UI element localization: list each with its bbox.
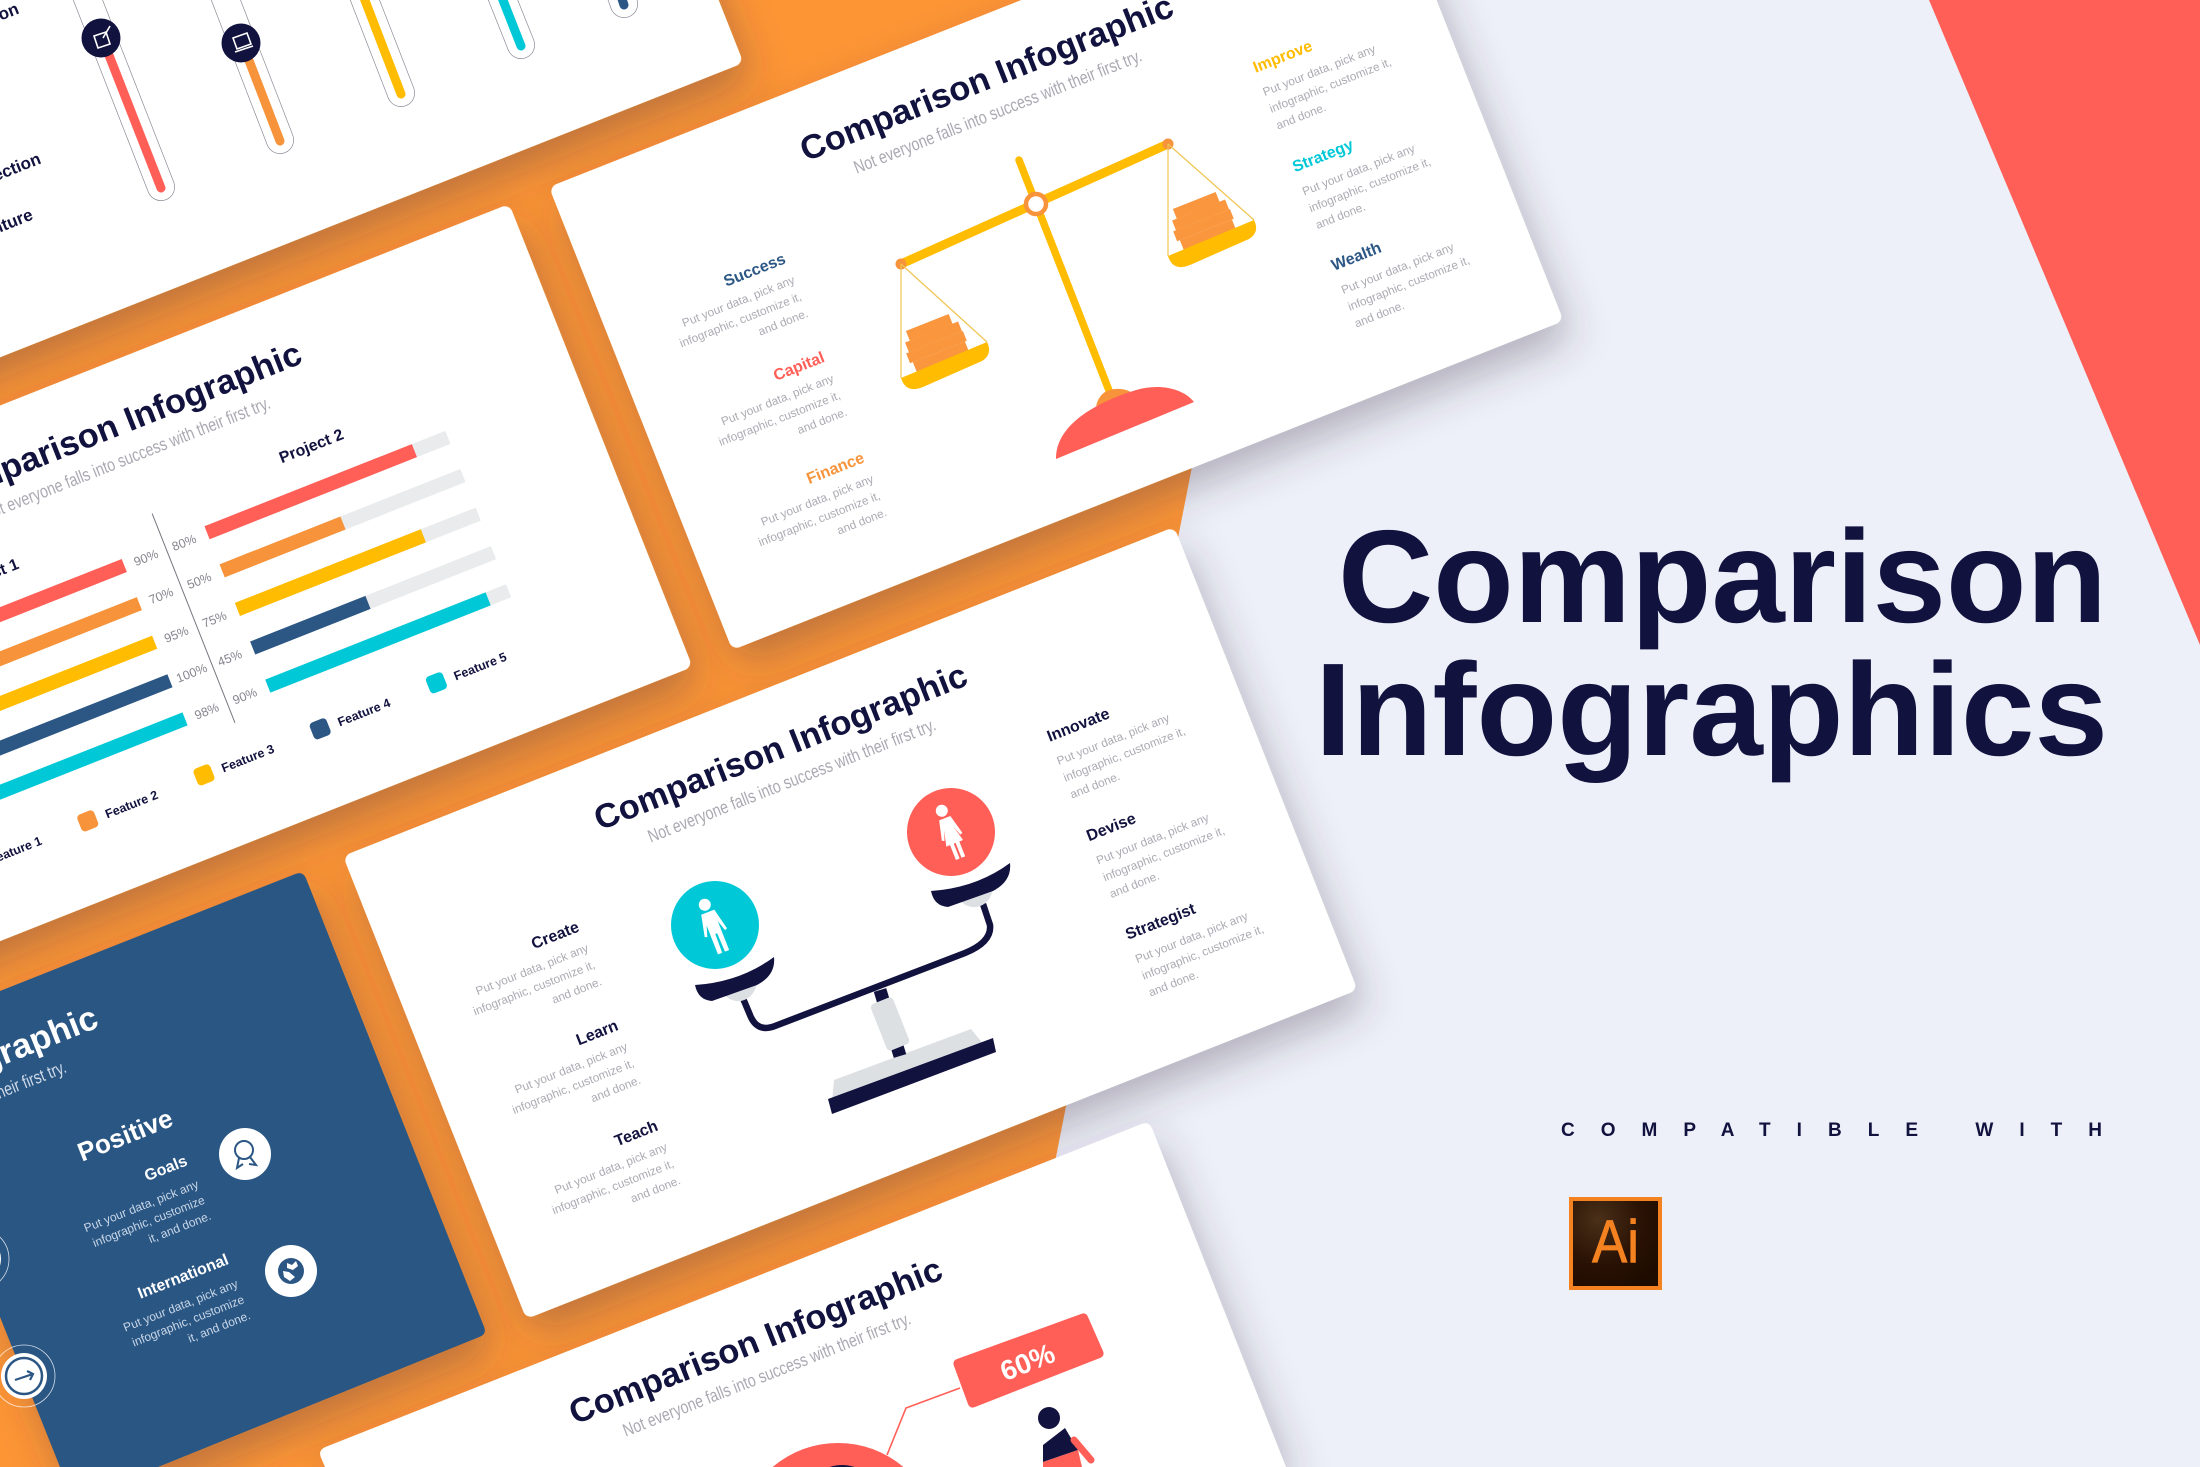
text: success: Success (721, 251, 788, 290)
project 1 percentages (129, 546, 224, 724)
panel: bar chart slide (0, 204, 693, 996)
text: teach: Teach (612, 1118, 660, 1150)
text: success: and done. (756, 306, 810, 339)
text: learn: Learn (574, 1017, 621, 1049)
icon: partial badge (0, 1228, 9, 1290)
text: improve: Improve (1251, 38, 1315, 77)
legend: Feature 4 (336, 696, 393, 729)
text: devise: infographic, customize it, (1101, 823, 1227, 884)
text: international: infographic, customize (130, 1292, 246, 1349)
project 1 bars (0, 559, 188, 821)
text: finance: Put your data, pick any (759, 472, 876, 529)
text: goals: infographic, customize (91, 1193, 207, 1250)
text: goals: it, and done. (146, 1209, 213, 1246)
project 1 percentages: 95% (162, 624, 191, 646)
text: teach: and done. (628, 1173, 682, 1206)
text: improve (1251, 13, 1400, 132)
connector line (887, 1388, 960, 1455)
text: learn: infographic, customize it, (510, 1056, 636, 1117)
text: wealth: Put your data, pick any (1339, 240, 1456, 297)
balance scale illustration (896, 138, 1256, 459)
text: strategist: and done. (1146, 967, 1200, 999)
subheading: Not everyone falls into success with their first try. (645, 715, 939, 847)
text: international: International (136, 1251, 231, 1303)
text: devise: Devise (1084, 810, 1139, 845)
tube 1 (84, 0, 161, 188)
text: teach: infographic, customize it, (550, 1156, 676, 1217)
text: international (111, 1251, 253, 1366)
text: learn: Put your data, pick any (513, 1039, 629, 1097)
text: devise: Put your data, pick any (1094, 810, 1211, 867)
text: finance: infographic, customize it, (756, 488, 882, 549)
text: wealth: infographic, customize it, (1346, 253, 1472, 314)
heading: Comparison Infographic (589, 656, 973, 838)
card and text (549, 0, 1564, 650)
project 2 percentages: 75% (200, 608, 229, 631)
tube 4 (499, 0, 521, 46)
text: finance: and done. (835, 505, 889, 537)
orange backdrop (0, 0, 1284, 1467)
left pan (898, 264, 989, 389)
text: improve: and done. (1274, 100, 1328, 132)
text: finance (741, 449, 889, 566)
text: goals: Put your data, pick any (82, 1177, 201, 1235)
red corner shape (1929, 0, 2200, 645)
text: capital (701, 349, 849, 466)
text: improve: infographic, customize it, (1267, 55, 1393, 116)
text: innovate: and done. (1068, 769, 1122, 801)
card half (0, 873, 485, 1467)
tube 2 (222, 0, 280, 141)
project 2 percentages: 45% (216, 647, 244, 669)
text: learn (495, 1017, 643, 1134)
text: innovate: infographic, customize it, (1061, 724, 1187, 785)
icon: pen in square (82, 18, 120, 58)
text: capital: and done. (795, 405, 849, 437)
card (320, 1123, 1286, 1467)
text: wealth: and done. (1352, 298, 1406, 330)
card (0, 0, 744, 392)
card (0, 204, 693, 996)
project 1 percentages: 100% (174, 661, 209, 686)
text: success: infographic, customize it, (678, 289, 803, 350)
text: devise (1084, 781, 1233, 901)
text: finance: Finance (804, 450, 867, 488)
positive label: Positive (73, 1103, 177, 1167)
text: create: infographic, customize it, (471, 958, 597, 1018)
labels (0, 0, 43, 246)
text: capital: Capital (771, 349, 827, 385)
callout: 60% (953, 1313, 1104, 1408)
text: create (456, 918, 604, 1035)
text: goals (72, 1152, 213, 1267)
card and text (343, 527, 1358, 1319)
project 1 percentages: 70% (147, 585, 175, 607)
project 2 percentages: 50% (185, 570, 213, 592)
text: strategist: infographic, customize it, (1140, 922, 1266, 983)
legend: Feature 5 (452, 650, 509, 683)
text: capital: Put your data, pick any (719, 371, 836, 428)
text: learn: and done. (589, 1073, 643, 1105)
text: wealth: Wealth (1329, 240, 1384, 275)
tube 3 (361, 0, 401, 94)
icon: Adobe Illustrator (1569, 1197, 1662, 1290)
callout: 60%: 60% (996, 1337, 1059, 1387)
tube 5 (619, 0, 624, 5)
panel: thermometer tubes slide (0, 0, 744, 392)
text: innovate: Put your data, pick any (1055, 711, 1172, 768)
panel: people balance slide (343, 527, 1358, 1319)
text: strategy: Put your data, pick any (1300, 141, 1417, 198)
project 2 percentages (170, 532, 259, 707)
text: international: Put your data, pick any (121, 1277, 240, 1335)
text: success: Put your data, pick any (680, 273, 797, 330)
text: strategist: Strategist (1123, 900, 1199, 944)
compatible with label: COMPATIBLE WITH (1561, 1120, 2102, 1141)
main title: Comparison (1338, 503, 2107, 650)
legend (0, 647, 509, 879)
text: capital: infographic, customize it, (717, 388, 842, 449)
right pan (1165, 144, 1256, 267)
subheading: Not everyone falls into success with their first try. (851, 46, 1145, 178)
panel: bottom percentage slide (320, 1123, 1286, 1467)
text: teach (534, 1117, 682, 1234)
project 1 percentages: 90% (132, 547, 160, 569)
slide text (0, 986, 253, 1467)
icon: laptop (222, 24, 260, 62)
panel: blue positive slide (0, 873, 485, 1467)
heading: Comparison Infographic (564, 1250, 948, 1432)
text: create: and done. (550, 974, 604, 1007)
red person circle (907, 788, 995, 876)
main title: Infographics (1315, 636, 2108, 783)
project 2 bars (204, 431, 511, 693)
text: create: Put your data, pick any (474, 941, 590, 998)
icon: arrow badge (0, 1345, 55, 1407)
project 2 percentages: 90% (231, 685, 259, 707)
text: innovate (1045, 682, 1194, 801)
icon: Adobe Illustrator: Ai (1592, 1208, 1639, 1275)
project 2 label: Project 2 (277, 426, 346, 467)
legend: Feature 3 (219, 742, 276, 775)
subheading: Not everyone falls into success with their first try. (620, 1309, 914, 1441)
text: success (662, 250, 810, 367)
icon: globe (265, 1245, 317, 1297)
text: strategist (1123, 880, 1272, 999)
project 1 percentages: 98% (193, 700, 221, 722)
project 2 percentages: 80% (170, 532, 198, 554)
text: international: it, and done. (186, 1308, 252, 1346)
text: wealth (1329, 211, 1478, 330)
legend: Feature 2 (103, 788, 160, 821)
text: teach: Put your data, pick any (552, 1140, 669, 1197)
red donut (773, 1443, 903, 1467)
text: goals: Goals (142, 1153, 190, 1185)
text: strategy: and done. (1313, 200, 1367, 232)
person figure (1038, 1407, 1091, 1467)
teal person circle (671, 881, 759, 969)
text: strategy: infographic, customize it, (1307, 154, 1433, 215)
icon: medal (219, 1128, 271, 1180)
main title (1315, 503, 2108, 783)
balance illustration (671, 788, 1010, 1114)
text: improve: Put your data, pick any (1261, 42, 1378, 99)
panel: coin scale slide (549, 0, 1564, 650)
text: strategist: Put your data, pick any (1133, 909, 1250, 966)
text: strategy (1290, 112, 1439, 232)
chart content (0, 391, 534, 879)
text: create: Create (529, 919, 582, 953)
text: innovate: Innovate (1045, 706, 1112, 746)
text: strategy: Strategy (1290, 137, 1356, 176)
text: devise: and done. (1107, 869, 1161, 901)
